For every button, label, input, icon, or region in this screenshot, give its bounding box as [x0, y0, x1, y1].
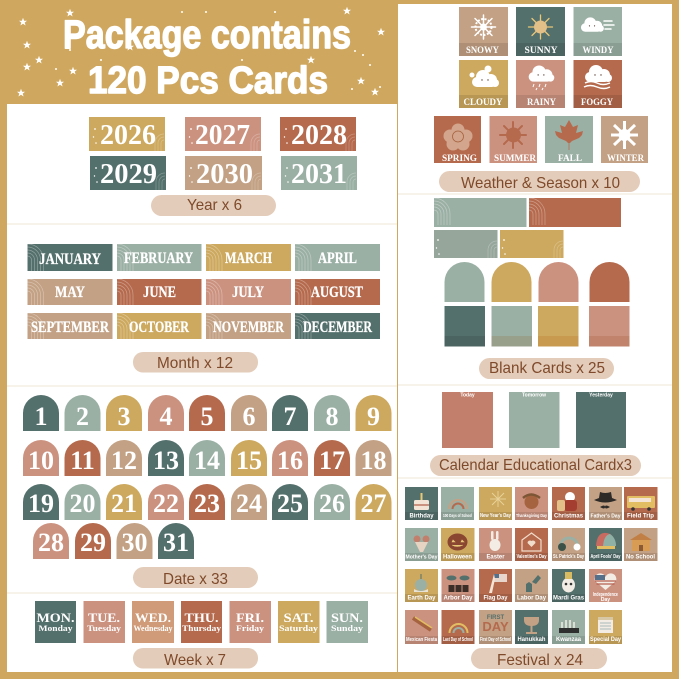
panel: weather and season cards: [434, 7, 648, 192]
title line 1: Package contains: [63, 13, 351, 57]
blank long cards: [434, 198, 621, 227]
festival row 3: [405, 569, 622, 603]
festival row 2: St. Patrick's Day: [553, 554, 584, 560]
month row 3: DECEMBER: [303, 319, 373, 336]
year card row 2: 2029: [100, 158, 157, 190]
label: weather and season count: Weather & Season x 10: [461, 175, 620, 192]
month row 3: [28, 313, 380, 340]
festival row 2: Valentine's Day: [516, 554, 547, 560]
festival row 4: Mexican Fiesta: [406, 637, 437, 643]
festival row 4: [405, 610, 622, 644]
panel: blank cards: [434, 198, 630, 379]
year card row 2: 2031: [291, 158, 347, 190]
festival row 3: Day: [601, 597, 610, 603]
blank short cards: [434, 230, 564, 258]
festival row 1: 100 Days of School: [443, 513, 472, 518]
festival row 2: Easter: [486, 554, 505, 560]
month row 1: APRIL: [318, 250, 357, 267]
month row 2: MAY: [55, 284, 85, 301]
date row 3: [23, 484, 392, 520]
month row 1: MARCH: [225, 250, 272, 267]
festival row 1: Field Trip: [627, 512, 654, 520]
tomorrow card: Tomorrow: [522, 392, 546, 398]
today card: Today: [460, 392, 475, 398]
weather card: cloudy: [459, 60, 508, 108]
festival row 2: Halloween: [443, 554, 472, 560]
week cards row: SUN.: [331, 611, 363, 625]
year card row 2: 2030: [196, 158, 253, 190]
date row 3: 23: [194, 489, 220, 518]
week cards row: [35, 601, 368, 643]
label: year count: Year x 6: [187, 197, 242, 214]
date row 1: 2: [76, 402, 89, 431]
date row 4: 30: [122, 528, 148, 557]
weather card: rainy: RAINY: [527, 97, 556, 107]
date row 1: 3: [118, 402, 130, 431]
festival row 3: Arbor Day: [444, 594, 473, 602]
date row 4: 28: [38, 528, 64, 557]
month row 2: JUNE: [143, 284, 176, 301]
month row 2: [28, 279, 380, 306]
week cards row: Wednesday: [134, 623, 173, 633]
panel: festival cards: [405, 487, 658, 669]
festival row 3: Earth Day: [408, 594, 436, 602]
label: month count: [133, 352, 258, 372]
date row 2: 10: [28, 446, 54, 475]
week cards row: FRI.: [236, 611, 264, 625]
date row 1: 7: [284, 402, 296, 431]
weather card: snowy: [459, 7, 508, 56]
weather card: foggy: FOGGY: [581, 97, 613, 107]
label: week count: Week x 7: [164, 652, 226, 669]
festival row 4: FIRST: [487, 615, 504, 621]
date row 2: 12: [111, 446, 137, 475]
week cards row: THU.: [184, 611, 218, 625]
festival row 1: Thanksgiving Day: [516, 513, 547, 518]
month row 3: OCTOBER: [129, 319, 190, 336]
week cards row: Friday: [236, 623, 265, 633]
date row 1: 5: [200, 402, 214, 431]
festival row 1: Father's Day: [590, 514, 621, 520]
panel: week cards: [35, 601, 368, 669]
tomorrow card: [509, 392, 560, 448]
date row 3: 25: [277, 489, 303, 518]
month row 1: JANUARY: [39, 251, 101, 268]
festival row 1: Birthday: [410, 512, 434, 520]
festival row 4: Kwanzaa: [556, 636, 581, 643]
week cards row: MON.: [36, 611, 74, 625]
date row 3: 22: [153, 489, 179, 518]
date row 1: 1: [34, 402, 48, 431]
year card row 1: 2028: [291, 119, 347, 151]
week cards row: Tuesday: [87, 623, 122, 633]
festival row 3: Independence: [593, 592, 618, 598]
festival row 1: Christmas: [554, 512, 583, 520]
week cards row: TUE.: [88, 611, 120, 625]
label: weather and season count: [439, 171, 640, 192]
date row 2: 14: [194, 446, 220, 475]
festival row 2: April Fools' Day: [590, 554, 621, 560]
festival row 4: First Day of School: [480, 637, 511, 643]
date row 1: 8: [326, 402, 338, 431]
date row 1: 9: [367, 402, 380, 431]
date row 4: [33, 523, 194, 559]
weather card: sunny: [516, 7, 565, 56]
panel: calendar educational cards: [430, 392, 641, 476]
season card: fall: [545, 116, 593, 163]
date row 3: 26: [319, 489, 345, 518]
label: year count: [151, 195, 276, 216]
weather card: windy: [574, 7, 622, 56]
festival row 1: New Year's Day: [480, 513, 511, 519]
label: festival count: Festival x 24: [497, 652, 583, 669]
weather card: sunny: SUNNY: [524, 45, 558, 55]
season card: spring: [434, 116, 481, 163]
season card: winter: [601, 116, 648, 163]
festival row 4: DAY: [482, 619, 509, 634]
date row 1: 6: [242, 402, 256, 431]
month row 1: FEBRUARY: [124, 250, 193, 267]
weather card: cloudy: CLOUDY: [464, 97, 503, 107]
date row 1: 4: [160, 402, 172, 431]
week cards row: SAT.: [284, 611, 314, 625]
date row 3: 24: [236, 489, 262, 518]
month row 1: [28, 244, 380, 271]
festival row 3: Flag Day: [484, 594, 508, 602]
yesterday card: Yesterday: [589, 392, 613, 398]
month row 2: JULY: [232, 284, 264, 301]
date row 2: 18: [360, 446, 386, 475]
festival row 4: Last Day of School: [443, 637, 473, 643]
label: month count: Month x 12: [157, 355, 233, 372]
panel: date cards: [23, 395, 392, 588]
month row 3: SEPTEMBER: [31, 319, 110, 336]
panel: month cards: [28, 244, 380, 372]
date row 2: 16: [277, 446, 303, 475]
weather card: foggy: [574, 60, 622, 108]
panel: title banner: [17, 7, 385, 102]
season card: fall: FALL: [558, 153, 582, 163]
year card row 1: [89, 117, 356, 151]
title line 2: 120 Pcs Cards: [88, 60, 328, 102]
festival row 3: Mardi Gras: [553, 594, 584, 602]
date row 3: 19: [28, 489, 54, 518]
blank square cards: [444, 306, 630, 346]
week cards row: Saturday: [279, 623, 319, 633]
yesterday card: [576, 392, 626, 448]
panel: right white area: [398, 4, 672, 672]
label: calendar count: Calendar Educational Cardx3: [439, 457, 632, 474]
label: date count: [133, 567, 258, 588]
festival row 4: Special Day: [590, 636, 621, 643]
festival row 3: Labor Day: [517, 594, 546, 602]
label: festival count: [471, 648, 607, 669]
label: date count: Date x 33: [163, 571, 228, 588]
date row 2: 17: [319, 446, 345, 475]
date row 3: 21: [111, 489, 137, 518]
festival row 2: No School: [626, 554, 655, 560]
today card: [442, 392, 493, 448]
date row 4: 29: [80, 528, 106, 557]
weather card: rainy: [516, 60, 565, 108]
date row 2: 15: [236, 446, 262, 475]
label: blank count: Blank Cards x 25: [489, 360, 605, 377]
date row 3: 27: [360, 489, 386, 518]
panel: left white area: [7, 104, 397, 672]
month row 3: NOVEMBER: [213, 319, 285, 336]
week cards row: Sunday: [331, 623, 364, 633]
blank arch cards: [444, 262, 630, 302]
year card row 1: 2026: [100, 119, 156, 151]
panel: year cards: [89, 117, 357, 216]
festival row 1: [405, 487, 658, 520]
season card: summer: [490, 116, 537, 163]
date row 2: 11: [70, 446, 95, 475]
season card: winter: WINTER: [607, 153, 644, 163]
week cards row: Monday: [38, 623, 73, 633]
festival row 4: Hanukkah: [518, 636, 546, 643]
date row 2: 13: [153, 446, 179, 475]
date row 2: [23, 440, 392, 476]
label: week count: [133, 648, 258, 669]
month row 2: AUGUST: [311, 284, 364, 301]
season card: summer: SUMMER: [494, 153, 537, 163]
week cards row: Thursday: [182, 623, 222, 633]
week cards row: WED.: [135, 611, 171, 625]
festival row 2: [405, 528, 658, 561]
season card: spring: SPRING: [442, 153, 477, 163]
weather card: snowy: SNOWY: [466, 45, 499, 55]
year card row 1: 2027: [195, 119, 250, 151]
date row 4: 31: [163, 528, 189, 557]
decorative stars: [17, 7, 385, 96]
year card row 2: [90, 156, 357, 190]
weather card: windy: WINDY: [582, 45, 614, 55]
date row 3: 20: [70, 489, 96, 518]
festival row 2: Mother's Day: [406, 554, 438, 560]
date row 1: [23, 395, 392, 431]
